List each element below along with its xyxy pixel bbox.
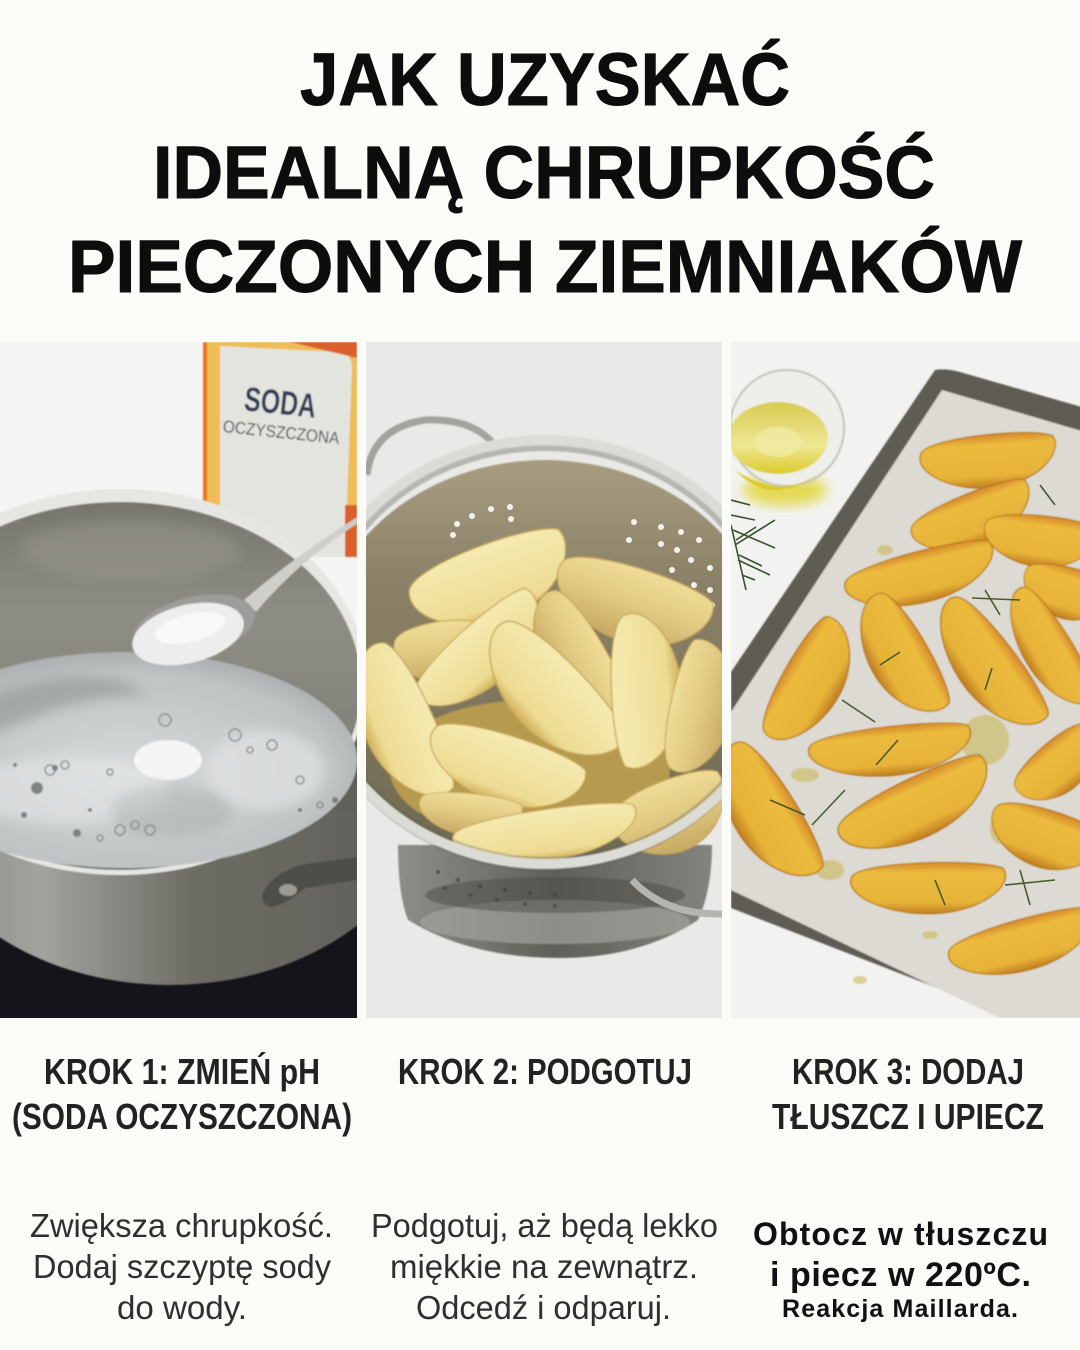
icon: baking tray (731, 369, 1080, 1018)
icon: hob (0, 924, 357, 1018)
icon: colander (366, 416, 722, 959)
step 2 description: miękkie na zewnątrz. (390, 1248, 698, 1285)
icon: colander holes (450, 504, 715, 608)
step 3 description: i piecz w 220ºC. (770, 1256, 1031, 1294)
step 1 heading (12, 1051, 352, 1137)
step 1 heading: KROK 1: ZMIEŃ pH (44, 1051, 320, 1092)
step 1 description: do wody. (117, 1289, 247, 1326)
icon: bowl of olive oil (728, 370, 844, 506)
icon: baking soda box (203, 342, 357, 557)
icon: potato wedges, boiled (366, 527, 722, 860)
oil spots (791, 545, 1010, 984)
step 1 description: Zwiększa chrupkość. (30, 1207, 333, 1244)
step 2 description: Podgotuj, aż będą lekko (371, 1207, 718, 1244)
step 2 description: Odcedź i odparuj. (416, 1289, 671, 1326)
icon: pot handle (262, 857, 357, 907)
icon: rosemary sprig (731, 500, 775, 590)
colander rim (366, 435, 722, 870)
step 3 heading (772, 1051, 1044, 1137)
title: IDEALNĄ CHRUPKOŚĆ (153, 131, 935, 214)
step 1 heading: (SODA OCZYSZCZONA) (12, 1096, 352, 1137)
icon: baking soda box: SODA (242, 380, 318, 426)
title: PIECZONYCH ZIEMNIAKÓW (68, 225, 1022, 308)
step 3 description: Obtocz w tłuszczu (753, 1216, 1048, 1252)
icon: spoon with soda (126, 517, 357, 676)
icon: right handle (632, 880, 722, 914)
icon: potato wedges, roasted (731, 431, 1080, 976)
step 3 description: Reakcja Maillarda. (782, 1295, 1018, 1323)
step 3 heading: KROK 3: DODAJ (792, 1051, 1024, 1092)
panel: step 2 photo, colander with parboiled potatoes (366, 342, 722, 1018)
step 1 description (30, 1207, 333, 1326)
step 2 heading: KROK 2: PODGOTUJ (398, 1051, 692, 1092)
icon: baking soda box: OCZYSZCZONA (222, 417, 341, 448)
icon: steel pot (0, 489, 357, 986)
panel: step 3 photo, tray of roasted potatoes (699, 342, 1080, 1018)
step 1 description: Dodaj szczyptę sody (33, 1248, 331, 1285)
step 3 description (753, 1216, 1048, 1323)
title: JAK UZYSKAĆ (300, 38, 790, 121)
icon: rosemary on potatoes (770, 485, 1055, 905)
title (68, 38, 1022, 308)
panel: step 1 photo, pot with baking soda (0, 342, 357, 1018)
step 2 description (371, 1207, 718, 1326)
